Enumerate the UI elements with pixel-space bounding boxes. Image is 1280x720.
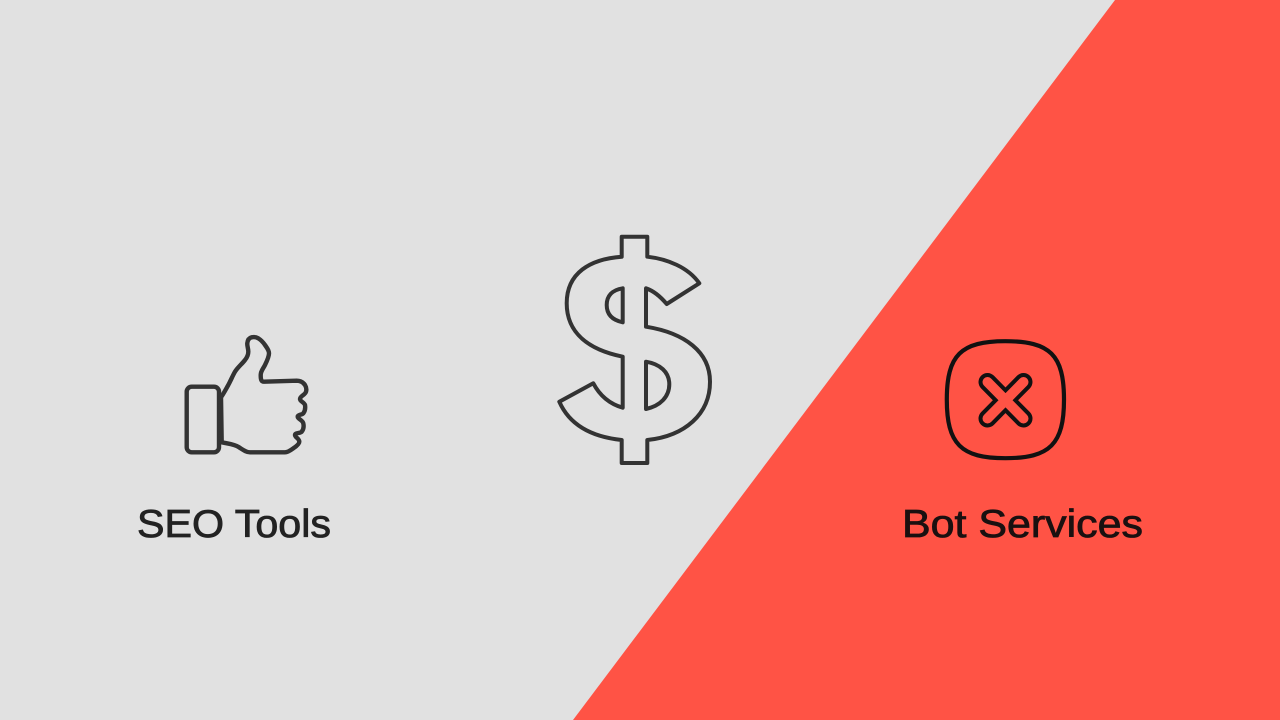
icon: dollar sign bbox=[559, 237, 710, 463]
icon: x in rounded square bbox=[947, 341, 1064, 458]
label: SEO Tools: SEO Tools bbox=[137, 503, 331, 546]
panel: red diagonal bbox=[573, 0, 1280, 720]
label: Bot Services: Bot Services bbox=[902, 503, 1143, 546]
icon: thumbs up bbox=[187, 337, 306, 452]
